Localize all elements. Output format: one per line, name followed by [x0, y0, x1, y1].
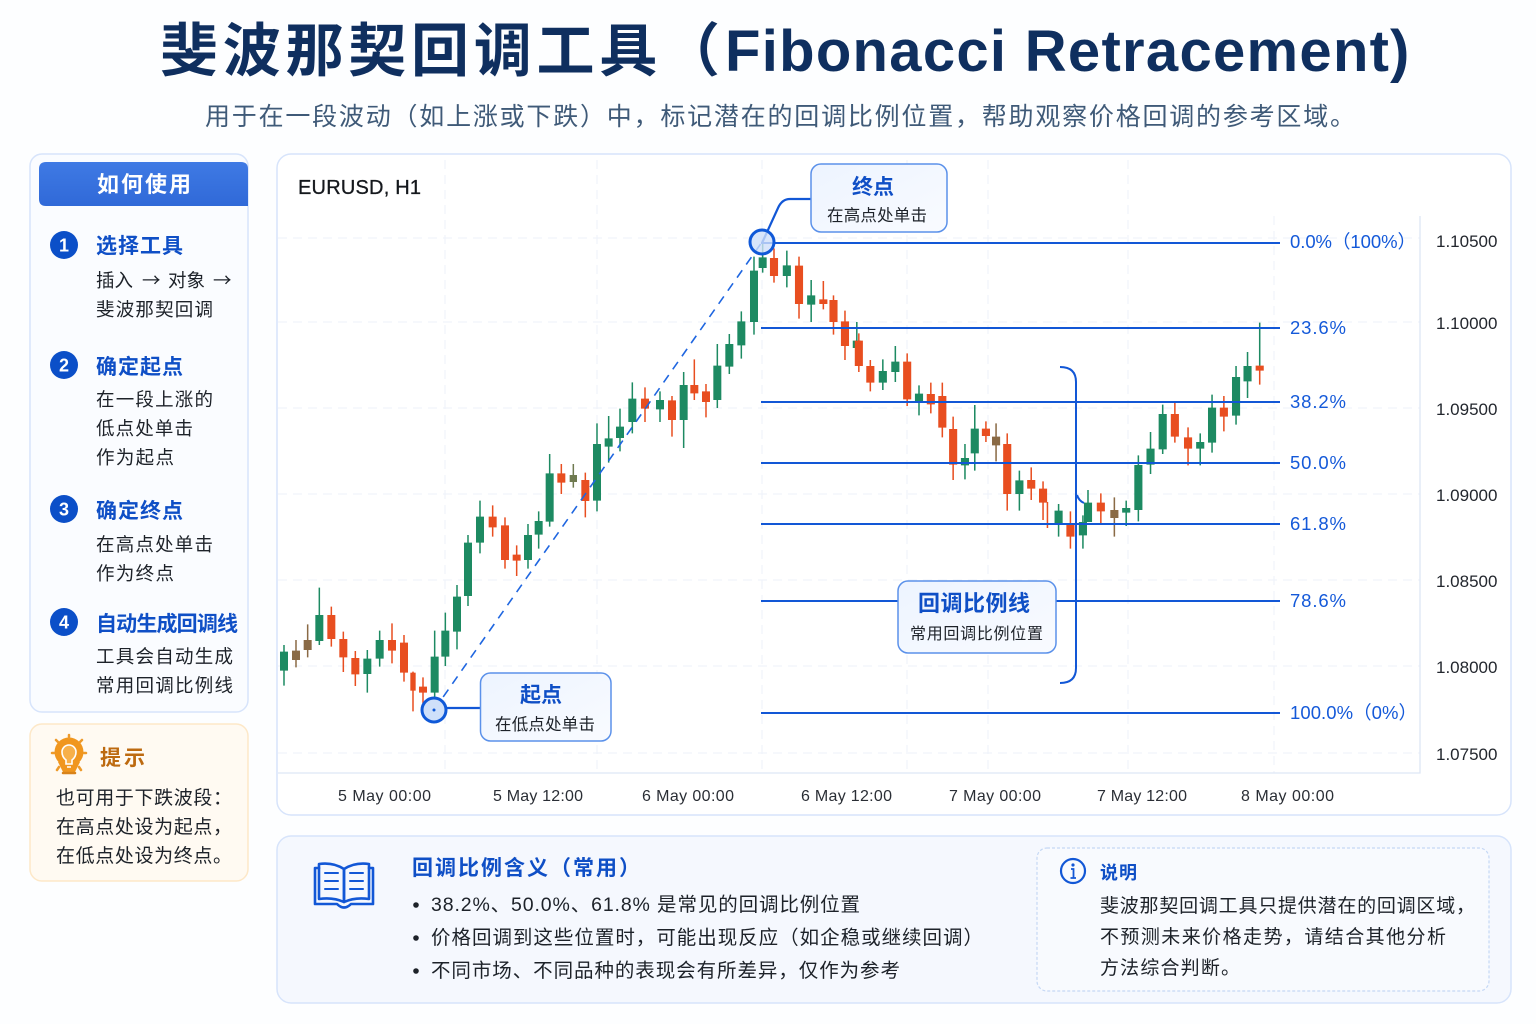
step 4: 工具会自动生成 [96, 646, 233, 667]
note text [1100, 895, 1475, 979]
tip text: 也可用于下跌波段： [56, 787, 232, 809]
price axis labels: 1.09000 [1436, 486, 1497, 505]
step 4: 常用回调比例线 [96, 675, 233, 696]
fibonacci labels: 50.0% [1290, 452, 1346, 473]
panel header: 如何使用 [97, 172, 191, 197]
start marker [422, 698, 480, 722]
step 1: → [213, 267, 232, 293]
time axis labels: 5 May 00:00 [338, 788, 431, 805]
step 1 [50, 231, 232, 320]
note box [1037, 848, 1489, 991]
callout: end [811, 164, 947, 232]
time axis labels: 7 May 00:00 [949, 788, 1041, 805]
step 1: 插入 [96, 270, 133, 291]
step 2: 作为起点 [96, 447, 174, 468]
ratio bullets: 价格回调到这些位置时，可能出现反应（如企稳或继续回调） [431, 927, 983, 949]
title: Fibonacci Retracement [725, 19, 1389, 84]
step 3: 确定终点 [96, 499, 183, 523]
bracket [1060, 367, 1084, 683]
step 3: 作为终点 [96, 563, 174, 584]
end marker [750, 199, 811, 254]
ratio heading: 回调比例含义（常用） [412, 857, 640, 880]
step 3 [50, 495, 213, 584]
chart axes [278, 216, 1420, 773]
callout: retracement lines: 常用回调比例位置 [910, 625, 1043, 643]
tip text: 在高点处设为起点， [56, 816, 232, 838]
icon: open book [315, 864, 373, 908]
time axis labels: 5 May 12:00 [493, 788, 583, 805]
callout: retracement lines: 回调比例线 [918, 591, 1030, 616]
fibonacci labels: 23.6% [1290, 317, 1346, 338]
note box: 说明 [1100, 863, 1137, 883]
fibonacci labels [1290, 231, 1417, 723]
panel: how to use [30, 154, 248, 712]
step 2: 在一段上涨的 [96, 389, 213, 410]
time axis labels: 8 May 00:00 [1241, 788, 1334, 805]
callout: start: 在低点处单击 [495, 715, 595, 734]
fibonacci labels: 78.6% [1290, 590, 1346, 611]
step 1: 1 [59, 236, 69, 256]
ratio bullets [413, 894, 983, 982]
subtitle: 用于在一段波动（如上涨或下跌）中，标记潜在的回调比例位置，帮助观察价格回调的参考区域。 [205, 103, 1355, 131]
panel header [39, 162, 248, 206]
dashed trend line [434, 242, 762, 710]
fibonacci levels [761, 243, 1280, 713]
chart grid [278, 160, 1420, 773]
ratio bullets: 38.2%、50.0%、61.8% 是常见的回调比例位置 [431, 894, 860, 916]
icon: light bulb [52, 735, 86, 773]
step 1: → [142, 267, 161, 293]
step 3: 在高点处单击 [96, 534, 213, 555]
step 2: 确定起点 [96, 355, 183, 379]
price axis labels: 1.10500 [1436, 232, 1497, 251]
fibonacci labels: 61.8% [1290, 513, 1346, 534]
time axis labels: 6 May 12:00 [801, 788, 892, 805]
step 2: 低点处单击 [96, 418, 193, 439]
time axis labels: 7 May 12:00 [1097, 788, 1187, 805]
panel: tip: 提示 [100, 747, 145, 770]
time axis labels [338, 788, 1334, 805]
step 2: 2 [59, 356, 69, 376]
callout: end: 终点 [852, 176, 894, 199]
title: ) [1390, 19, 1409, 84]
step 1: 对象 [168, 270, 205, 291]
tip text: 在低点处设为终点。 [56, 845, 232, 867]
step 4: 自动生成回调线 [96, 612, 238, 636]
price axis labels: 1.08500 [1436, 572, 1497, 591]
title: 斐波那契回调工具（ [160, 19, 720, 84]
title [160, 19, 1409, 84]
price axis labels: 1.09500 [1436, 400, 1497, 419]
chart symbol: EURUSD, H1 [298, 177, 421, 199]
note text: 方法综合判断。 [1100, 957, 1240, 979]
price axis labels [1436, 232, 1497, 764]
step 3: 3 [59, 500, 69, 520]
step 4 [50, 608, 238, 696]
step 1: 斐波那契回调 [96, 299, 213, 320]
price axis labels: 1.10000 [1436, 314, 1497, 333]
panel: chart [277, 154, 1511, 815]
callout: start: 起点 [520, 684, 562, 707]
step 4: 4 [59, 612, 69, 632]
candlesticks [284, 240, 1260, 711]
price axis labels: 1.08000 [1436, 658, 1497, 677]
note text: 斐波那契回调工具只提供潜在的回调区域， [1100, 895, 1475, 917]
tip text [56, 787, 232, 867]
step 2 [50, 351, 213, 468]
callout: retracement lines [898, 581, 1056, 653]
step 1: 选择工具 [96, 235, 183, 258]
callout: start [480, 673, 611, 741]
fibonacci labels: 38.2% [1290, 391, 1346, 412]
icon: info [1061, 859, 1085, 883]
panel: tip [30, 724, 248, 881]
note text: 不预测未来价格走势，请结合其他分析 [1100, 926, 1446, 948]
callout: end: 在高点处单击 [827, 206, 927, 225]
fibonacci labels: 0.0%（100%） [1290, 231, 1416, 252]
price axis labels: 1.07500 [1436, 745, 1497, 764]
time axis labels: 6 May 00:00 [642, 788, 734, 805]
ratio bullets: 不同市场、不同品种的表现会有所差异，仅作为参考 [431, 960, 900, 982]
fibonacci labels: 100.0%（0%） [1290, 702, 1417, 723]
panel: ratio meaning [277, 836, 1511, 1003]
